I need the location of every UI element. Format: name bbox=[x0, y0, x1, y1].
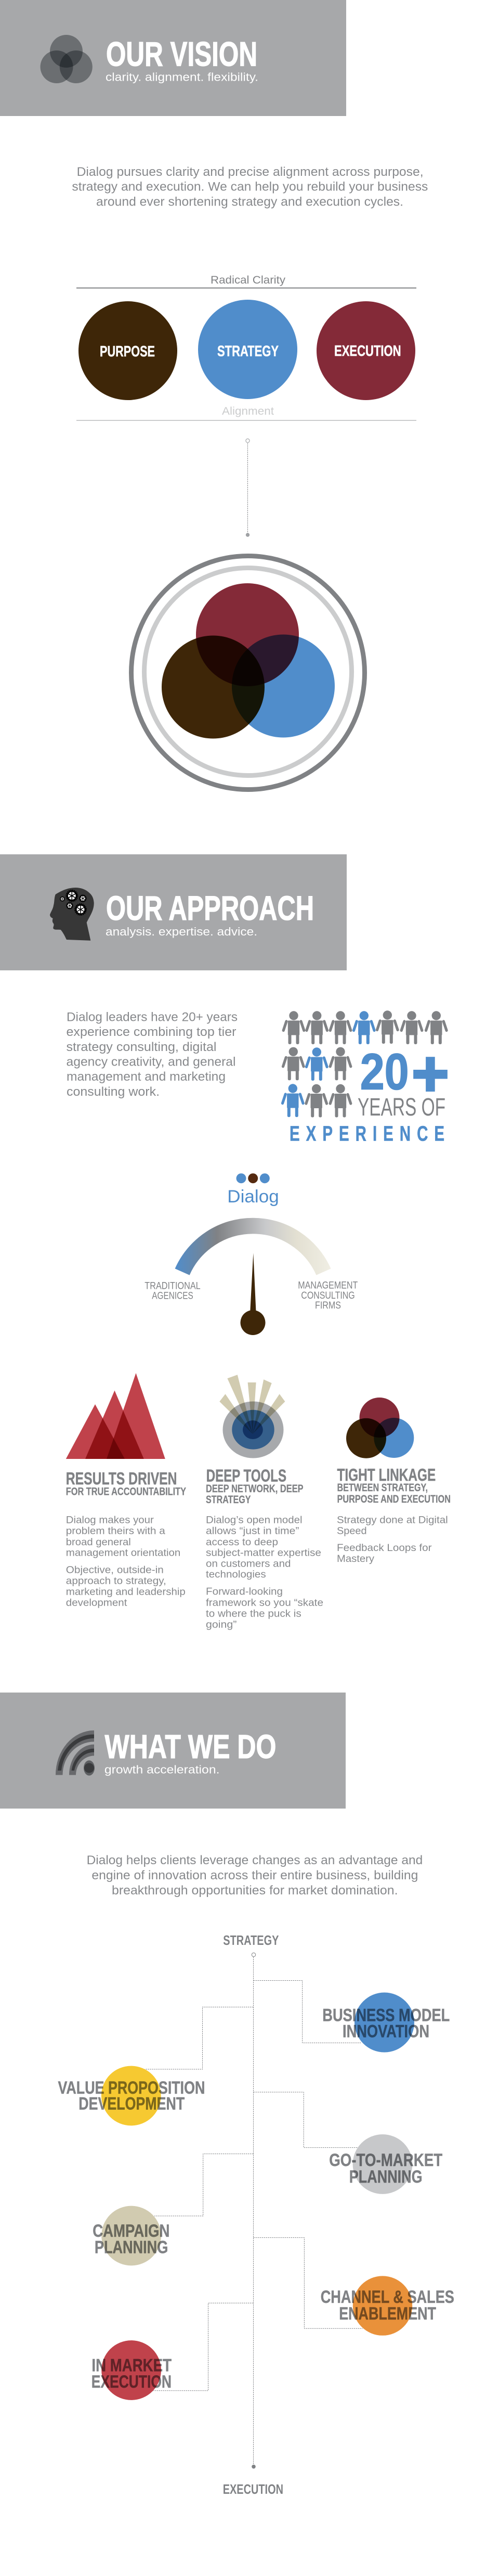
node: value proposition development bbox=[58, 2066, 205, 2125]
node: business model innovation: INNOVATION bbox=[343, 2021, 429, 2041]
node: campaign planning bbox=[93, 2206, 169, 2265]
stat: 20+: 20 bbox=[360, 1043, 409, 1100]
node: in market execution bbox=[91, 2340, 172, 2400]
subheading: deep network: STRATEGY bbox=[206, 1493, 251, 1506]
text block: tools: subject-matter expertise bbox=[206, 1547, 321, 1559]
text block: vision intro bbox=[72, 165, 428, 209]
heading: tight linkage: TIGHT LINKAGE bbox=[337, 1465, 436, 1484]
icon: red mountains bbox=[66, 1373, 165, 1459]
diagram: venn in rings bbox=[131, 556, 365, 790]
panel: tight linkage bbox=[337, 1398, 451, 1565]
node: go-to-market planning: GO-TO-MARKET bbox=[329, 2150, 442, 2170]
node: business model innovation: BUSINESS MODEL bbox=[322, 2005, 450, 2025]
subheading: approach: analysis. expertise. advice. bbox=[106, 925, 257, 938]
label: strategy: STRATEGY bbox=[223, 1933, 279, 1948]
subheading: growth: growth acceleration. bbox=[104, 1763, 219, 1776]
text block: tools: access to deep bbox=[206, 1537, 278, 1548]
circle: purpose bbox=[78, 301, 177, 400]
label: dialog: Dialog bbox=[227, 1187, 279, 1207]
subheading: vision: clarity. alignment. flexibility. bbox=[106, 71, 258, 83]
label: radical clarity: Radical Clarity bbox=[211, 274, 286, 286]
text block: what we do intro: breakthrough opportunities for market domination. bbox=[112, 1883, 398, 1898]
text block: approach intro bbox=[67, 1010, 238, 1099]
text block: vision intro: around ever shortening strategy and execution cycles. bbox=[96, 195, 403, 209]
panel: deep tools bbox=[206, 1375, 323, 1631]
text block: tools: Forward-looking bbox=[206, 1586, 283, 1597]
heading: our vision: OUR VISION bbox=[106, 35, 257, 73]
circle: purpose: PURPOSE bbox=[100, 343, 155, 360]
text block: tools: framework so you “skate bbox=[206, 1597, 323, 1608]
text block: tools: on customers and bbox=[206, 1558, 291, 1569]
text block: vision intro: Dialog pursues clarity and precise alignment across purpose, bbox=[77, 165, 424, 179]
icon: small venn bbox=[346, 1398, 414, 1458]
text block: approach intro: experience combining top tier bbox=[67, 1025, 237, 1039]
text block: tools: technologies bbox=[206, 1569, 266, 1580]
label: execution: EXECUTION bbox=[223, 2482, 283, 2497]
heading: what we do: WHAT WE DO bbox=[105, 1728, 277, 1765]
node: go-to-market planning: PLANNING bbox=[349, 2167, 423, 2187]
node: value proposition development: DEVELOPMENT bbox=[78, 2094, 185, 2114]
subheading: deep network bbox=[206, 1482, 304, 1506]
text block: linkage: Speed bbox=[337, 1526, 367, 1537]
text block: approach intro: agency creativity, and general bbox=[67, 1055, 236, 1069]
node: campaign planning: PLANNING bbox=[95, 2237, 168, 2257]
subheading: between strategy: PURPOSE AND EXECUTION bbox=[337, 1492, 451, 1505]
text block: tools: Dialog’s open model bbox=[206, 1515, 303, 1526]
gauge arc bbox=[182, 1226, 323, 1272]
text block: results: marketing and leadership bbox=[66, 1587, 186, 1598]
node: channel and sales enablement: ENABLEMENT bbox=[339, 2304, 436, 2324]
node: value proposition development: VALUE PROPOSITION bbox=[58, 2078, 205, 2098]
node: in market execution: EXECUTION bbox=[91, 2372, 172, 2392]
icon: head with gears bbox=[50, 888, 94, 941]
node: channel and sales enablement bbox=[321, 2276, 454, 2336]
timeline spine bbox=[252, 1953, 256, 2469]
text block: results: development bbox=[66, 1597, 127, 1608]
text block: results: management orientation bbox=[66, 1547, 180, 1559]
stat: 20+: + bbox=[412, 1039, 449, 1109]
text block: vision intro: strategy and execution. We can help you rebuild your business bbox=[72, 180, 428, 194]
text block: results: broad general bbox=[66, 1537, 131, 1548]
subheading: deep network: DEEP NETWORK, DEEP bbox=[206, 1482, 304, 1495]
panel: results driven bbox=[66, 1373, 186, 1608]
icon: signal arcs bbox=[56, 1731, 95, 1776]
circle: execution bbox=[317, 301, 415, 400]
text block: tools: allows “just in time” bbox=[206, 1526, 299, 1537]
icon: people grid bbox=[283, 1010, 447, 1118]
text block: tools bbox=[206, 1515, 323, 1631]
node: business model innovation bbox=[322, 1993, 450, 2052]
banner: our vision bbox=[0, 0, 346, 116]
text block: linkage bbox=[337, 1515, 448, 1565]
text block: results: approach to strategy, bbox=[66, 1575, 166, 1587]
label: alignment: Alignment bbox=[222, 405, 274, 417]
text block: results: Dialog makes your bbox=[66, 1515, 154, 1526]
text block: what we do intro: Dialog helps clients leverage changes as an advantage and bbox=[87, 1853, 423, 1867]
text block: results bbox=[66, 1515, 186, 1608]
panel: 20+ years of experience bbox=[283, 1010, 449, 1146]
text block: tools: to where the puck is bbox=[206, 1608, 301, 1619]
node: in market execution: IN MARKET bbox=[91, 2356, 172, 2376]
label: experience: EXPERIENCE bbox=[290, 1122, 444, 1146]
text block: tools: going” bbox=[206, 1619, 237, 1631]
label: management consulting firms bbox=[298, 1280, 358, 1311]
circle: strategy bbox=[198, 300, 297, 399]
text block: linkage: Mastery bbox=[337, 1554, 375, 1565]
icon: target with rays bbox=[219, 1375, 285, 1458]
text block: approach intro: Dialog leaders have 20+ years bbox=[67, 1010, 238, 1024]
icon: three overlapping circles bbox=[41, 35, 93, 83]
chart: dialog gauge bbox=[145, 1173, 358, 1335]
label: traditional agencies bbox=[145, 1280, 201, 1302]
text block: results: problem theirs with a bbox=[66, 1526, 165, 1537]
text block: what we do intro bbox=[87, 1853, 423, 1898]
subheading: between strategy: BETWEEN STRATEGY, bbox=[337, 1481, 428, 1494]
node: go-to-market planning bbox=[329, 2134, 442, 2194]
label: management consulting firms: MANAGEMENT bbox=[298, 1280, 358, 1291]
text block: results: Objective, outside-in bbox=[66, 1565, 164, 1575]
subheading: between strategy bbox=[337, 1481, 451, 1505]
subheading: accountability: FOR TRUE ACCOUNTABILITY bbox=[66, 1484, 186, 1497]
diagram: radical clarity and alignment bbox=[76, 274, 416, 421]
branch connectors bbox=[145, 1980, 363, 2391]
label: traditional agencies: TRADITIONAL bbox=[145, 1280, 201, 1291]
banner: our approach bbox=[0, 854, 347, 970]
diagram: strategy to execution tree bbox=[58, 1933, 454, 2497]
stat: 20+ bbox=[360, 1039, 449, 1109]
text block: linkage: Strategy done at Digital bbox=[337, 1515, 448, 1526]
heading: deep tools: DEEP TOOLS bbox=[206, 1466, 286, 1485]
text block: what we do intro: engine of innovation across their entire business, building bbox=[91, 1868, 418, 1882]
text block: approach intro: strategy consulting, digital bbox=[67, 1040, 216, 1054]
node: channel and sales enablement: CHANNEL & SALES bbox=[321, 2287, 454, 2307]
circle: execution: EXECUTION bbox=[334, 343, 401, 360]
label: management consulting firms: CONSULTING bbox=[301, 1290, 355, 1301]
logo: dialog dots bbox=[236, 1173, 270, 1183]
gauge needle bbox=[240, 1253, 265, 1335]
node: campaign planning: CAMPAIGN bbox=[93, 2221, 169, 2241]
arrow: dotted connector bbox=[246, 439, 250, 537]
banner: what we do bbox=[0, 1693, 346, 1809]
label: management consulting firms: FIRMS bbox=[315, 1300, 341, 1311]
label: years of: YEARS OF bbox=[358, 1093, 445, 1121]
text block: approach intro: consulting work. bbox=[67, 1085, 160, 1099]
circle: strategy: STRATEGY bbox=[217, 343, 279, 360]
label: traditional agencies: AGENICES bbox=[152, 1290, 193, 1302]
text block: linkage: Feedback Loops for bbox=[337, 1543, 432, 1554]
heading: our approach: OUR APPROACH bbox=[106, 889, 314, 927]
heading: results driven: RESULTS DRIVEN bbox=[66, 1469, 177, 1488]
text block: approach intro: management and marketing bbox=[67, 1070, 226, 1084]
